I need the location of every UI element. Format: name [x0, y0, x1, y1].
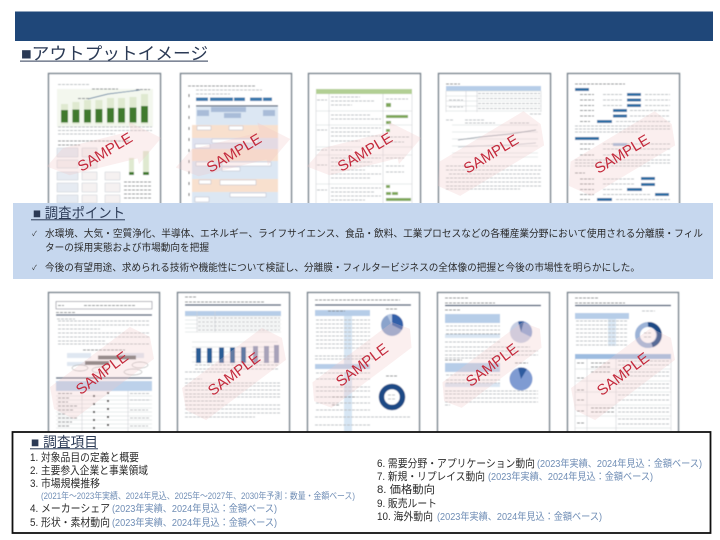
watermark 7: SAMPLE: [205, 349, 264, 400]
watermark 2: [170, 116, 295, 187]
watermark 4: [428, 107, 551, 203]
items 1 to 5: 4. メーカーシェア: [30, 502, 110, 515]
watermark 5: [559, 107, 682, 203]
items 1 to 5: 2. 主要参入企業と事業領域: [30, 463, 148, 477]
SAMPLE watermarks: bottom row: [42, 316, 683, 426]
items 6 to 10: 10. 海外動向: [377, 509, 433, 523]
watermark 8: SAMPLE: [333, 340, 392, 391]
items 6 to 10: 9. 販売ルート: [377, 497, 437, 510]
panel: survey items: [12, 432, 710, 533]
sample page 3: company table: [308, 74, 420, 206]
bullet 1: ターの採用実態および市場動向を把握: [45, 241, 209, 254]
watermark 1: SAMPLE: [75, 129, 136, 175]
items 6 to 10: [377, 456, 702, 523]
sample page 10: donut and table page: [568, 292, 678, 434]
items 1 to 5: [30, 451, 355, 529]
watermark 2: SAMPLE: [204, 130, 265, 176]
watermark 1: [41, 115, 166, 186]
watermark 3: SAMPLE: [335, 129, 396, 175]
watermark 6: SAMPLE: [73, 348, 132, 399]
header bar: [15, 12, 713, 41]
items 6 to 10: 6. 需要分野・アプリケーション動向: [377, 456, 535, 470]
heading: survey points: ■ 調査ポイント: [33, 205, 125, 221]
items 6 to 10: 7. 新規・リプレイス動向: [377, 469, 485, 483]
watermark 9: [434, 316, 550, 414]
sample page 2: company map: [180, 74, 292, 206]
watermark 10: SAMPLE: [594, 349, 653, 400]
sample page 9: pie charts page: [438, 292, 550, 434]
bullet 1: 水環境、大気・空質浄化、半導体、エネルギー、ライフサイエンス、食品・飲料、工業プロセスなどの各種産業分野において使用される分離膜・フィル: [45, 227, 703, 240]
sample page 5: share matrix: [568, 74, 680, 206]
watermark 6: [42, 321, 162, 425]
watermark 4: SAMPLE: [461, 131, 522, 177]
items 1 to 5: 5. 形状・素材動向: [30, 515, 110, 529]
items 6 to 10: (2023年実績、2024年見込：金額ベース): [537, 457, 702, 470]
items 1 to 5: (2023年実績、2024年見込：金額ベース): [112, 516, 277, 529]
sample page 8: pie charts page: [308, 292, 420, 434]
sample page 1: market size chart: [48, 74, 160, 206]
bullet 1: ✓: [32, 230, 37, 238]
bullet 2: 今後の有望用途、求められる技術や機能性について検証し、分離膜・フィルタービジネスの全体像の把握と今後の市場性を明らかにした。: [45, 261, 640, 274]
sample pages: bottom row: [48, 292, 678, 434]
bullet 1: [32, 227, 703, 254]
watermark 3: [301, 115, 426, 186]
panel: survey points: [13, 203, 713, 279]
watermark 9: SAMPLE: [463, 340, 522, 391]
sample page 4: market data table and line chart: [438, 74, 550, 206]
items 1 to 5: (2021年～2023年実績、2024年見込、2025年～2027年、2030年予測：数量・金額ベース): [41, 490, 355, 501]
items 6 to 10: (2023年実績、2024年見込：金額ベース): [488, 470, 653, 483]
watermark 7: [174, 322, 294, 426]
items 1 to 5: 3. 市場規模推移: [30, 476, 100, 490]
title: output image: ■アウトプットイメージ: [21, 44, 208, 64]
items 6 to 10: (2023年実績、2024年見込：金額ベース): [437, 510, 602, 523]
items 1 to 5: (2023年実績、2024年見込：金額ベース): [112, 502, 277, 515]
watermark 8: [304, 316, 420, 414]
watermark 10: [563, 322, 683, 426]
items 1 to 5: 1. 対象品目の定義と概要: [30, 451, 139, 464]
sample page 6: overview table: [48, 292, 160, 434]
watermark 5: SAMPLE: [592, 131, 653, 177]
SAMPLE watermarks: top row: [41, 107, 682, 203]
sample page 7: bar chart page: [178, 292, 290, 434]
bullet 2: ✓: [32, 264, 37, 272]
sample pages: top row: [48, 74, 680, 206]
heading: survey items: ■ 調査項目: [31, 434, 98, 450]
items 6 to 10: 8. 価格動向: [377, 482, 435, 496]
